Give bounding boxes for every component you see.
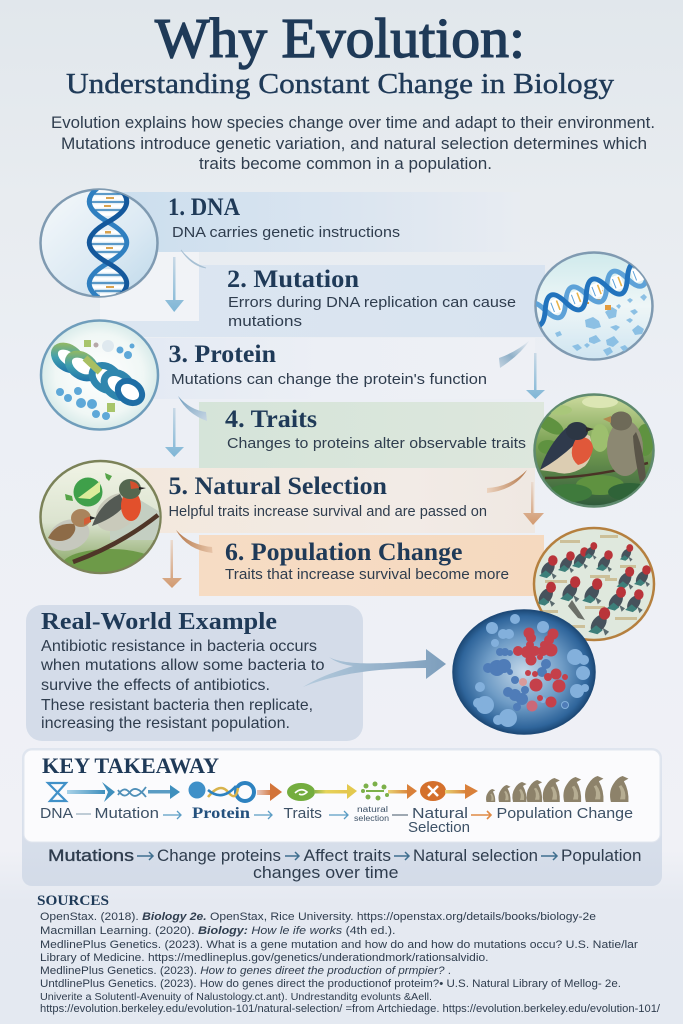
process labels: Mutation bbox=[94, 805, 159, 822]
intro text: Mutations introduce genetic variation, and natural selection determines which bbox=[61, 135, 647, 153]
icon: bacteria circle bbox=[453, 610, 595, 734]
intro text bbox=[51, 114, 655, 173]
example text: increasing the resistant population. bbox=[41, 715, 290, 732]
swoosh: DNA to mutation bbox=[181, 250, 206, 268]
icon: traits birds circle bbox=[534, 394, 654, 506]
process labels: natural bbox=[357, 805, 388, 814]
sources list: MedlinePlus Genetics. (2023). What is a gene mutation and how do and how do mutations occu? U.S. Natie/lar bbox=[40, 939, 638, 951]
key takeaway summary: Population bbox=[561, 847, 642, 865]
sources heading: SOURCES bbox=[37, 893, 109, 909]
process icon row bbox=[48, 776, 629, 802]
step 2 heading: 2. Mutation bbox=[227, 266, 359, 293]
step 1 heading: 1. DNA bbox=[168, 194, 240, 221]
process labels: DNA bbox=[40, 805, 73, 822]
arrow: protein to natural selection bbox=[165, 408, 184, 457]
step 4 panel: Traits bbox=[199, 402, 544, 468]
arrow: DNA to protein bbox=[165, 257, 184, 312]
intro text: Evolution explains how species change over time and adapt to their environment. bbox=[51, 114, 655, 132]
step 6 heading: 6. Population Change bbox=[225, 539, 462, 566]
sources list: Library of Medicine. https://medlineplus.gov/genetics/underationdmork/rationsalvidio. bbox=[40, 952, 488, 964]
sources list: Univerite a Solutentl-Avenuity of Nalustology.ct.ant). Undrestanditg evolunts &Aell. bbox=[40, 992, 432, 1003]
step 4 description: Changes to proteins alter observable traits bbox=[227, 435, 526, 452]
panel: real-world example bbox=[26, 605, 363, 741]
icon: DNA helix circle bbox=[40, 181, 158, 304]
step 6 description: Traits that increase survival become more bbox=[225, 566, 509, 583]
step 3 description: Mutations can change the protein's function bbox=[171, 371, 487, 388]
step 2 panel: Mutation bbox=[100, 265, 545, 337]
sources list: OpenStax. (2018). Biology 2e. OpenStax, Rice University. https://openstax.org/details/books/biology-2e bbox=[40, 911, 596, 923]
arrow: natural selection to population bbox=[162, 540, 182, 588]
key takeaway heading: KEY TAKEAWAY bbox=[42, 753, 219, 778]
sources section bbox=[37, 893, 661, 1015]
sources list: https://evolution.berkeley.edu/evolution-101/natural-selection/ =from Artchiedage. https://evolution.berkeley.edu/evolution-101/ bbox=[40, 1003, 661, 1015]
swoosh: mutation to protein bbox=[499, 340, 530, 368]
process labels: Traits bbox=[284, 805, 322, 822]
swoosh: protein to traits bbox=[178, 396, 207, 421]
process labels: Protein bbox=[192, 805, 250, 822]
panel: key takeaway bbox=[22, 748, 662, 886]
arrow: example to bacteria bbox=[303, 649, 446, 687]
step 2 description: mutations bbox=[228, 313, 302, 330]
label arrows bbox=[76, 811, 491, 819]
step 3 heading: 3. Protein bbox=[168, 341, 276, 368]
process labels bbox=[40, 805, 633, 836]
key takeaway summary bbox=[48, 847, 642, 882]
swoosh: natural selection to population bbox=[176, 530, 212, 553]
key takeaway summary: Natural selection bbox=[413, 847, 538, 865]
summary arrows bbox=[137, 852, 557, 860]
step 4 heading: 4. Traits bbox=[225, 406, 317, 433]
icon: population circle bbox=[534, 528, 654, 640]
arrow: traits to population bbox=[523, 482, 544, 525]
key takeaway summary: changes over time bbox=[253, 864, 398, 882]
example text: survive the effects of antibiotics. bbox=[41, 677, 270, 694]
key takeaway summary: Change proteins bbox=[157, 847, 281, 865]
step 2 description bbox=[228, 294, 516, 330]
arrow: mutation to traits bbox=[526, 353, 545, 399]
title: Why Evolution: bbox=[155, 8, 525, 70]
step 1 description: DNA carries genetic instructions bbox=[172, 224, 400, 241]
sources list: UntdlinePlus Genetics. (2023). How do genes direct the productionof proteim?• U.S. Natural Library of Mellog- 2e. bbox=[40, 978, 621, 990]
key takeaway summary: Mutations bbox=[48, 847, 134, 865]
sources list bbox=[40, 911, 661, 1015]
step 6 panel: Population Change bbox=[199, 535, 544, 596]
step 5 panel: Natural Selection bbox=[110, 468, 535, 533]
step 5 heading: 5. Natural Selection bbox=[168, 473, 387, 500]
process labels: Selection bbox=[408, 819, 470, 836]
swoosh: traits to natural selection bbox=[487, 470, 527, 493]
example text: These resistant bacteria then replicate, bbox=[41, 697, 313, 714]
key takeaway summary: Affect traits bbox=[304, 847, 391, 865]
icon: mutation circle bbox=[520, 252, 652, 360]
step 5 description: Helpful traits increase survival and are passed on bbox=[168, 503, 487, 520]
example heading: Real-World Example bbox=[41, 609, 277, 635]
sources list: Macmillan Learning. (2020). Biology: How le ife works (4th ed.). bbox=[40, 925, 395, 937]
step 3 panel: Protein bbox=[110, 338, 535, 399]
example text bbox=[40, 638, 325, 732]
subtitle: Understanding Constant Change in Biology bbox=[66, 69, 614, 100]
process labels: Population Change bbox=[496, 805, 633, 822]
example text: Antibiotic resistance in bacteria occurs bbox=[41, 638, 317, 655]
process labels: Natural bbox=[412, 805, 468, 822]
icon: natural selection birds circle bbox=[40, 461, 165, 581]
process labels: selection bbox=[354, 814, 389, 823]
intro text: traits become common in a population. bbox=[199, 155, 492, 173]
step 1 panel: DNA bbox=[110, 192, 520, 252]
icon: protein circle bbox=[41, 320, 158, 430]
step 2 description: Errors during DNA replication can cause bbox=[228, 294, 516, 311]
example text: when mutations allow some bacteria to bbox=[40, 657, 325, 674]
sources list: MedlinePlus Genetics. (2023). How to genes direet the production of prmpier? . bbox=[40, 965, 451, 977]
